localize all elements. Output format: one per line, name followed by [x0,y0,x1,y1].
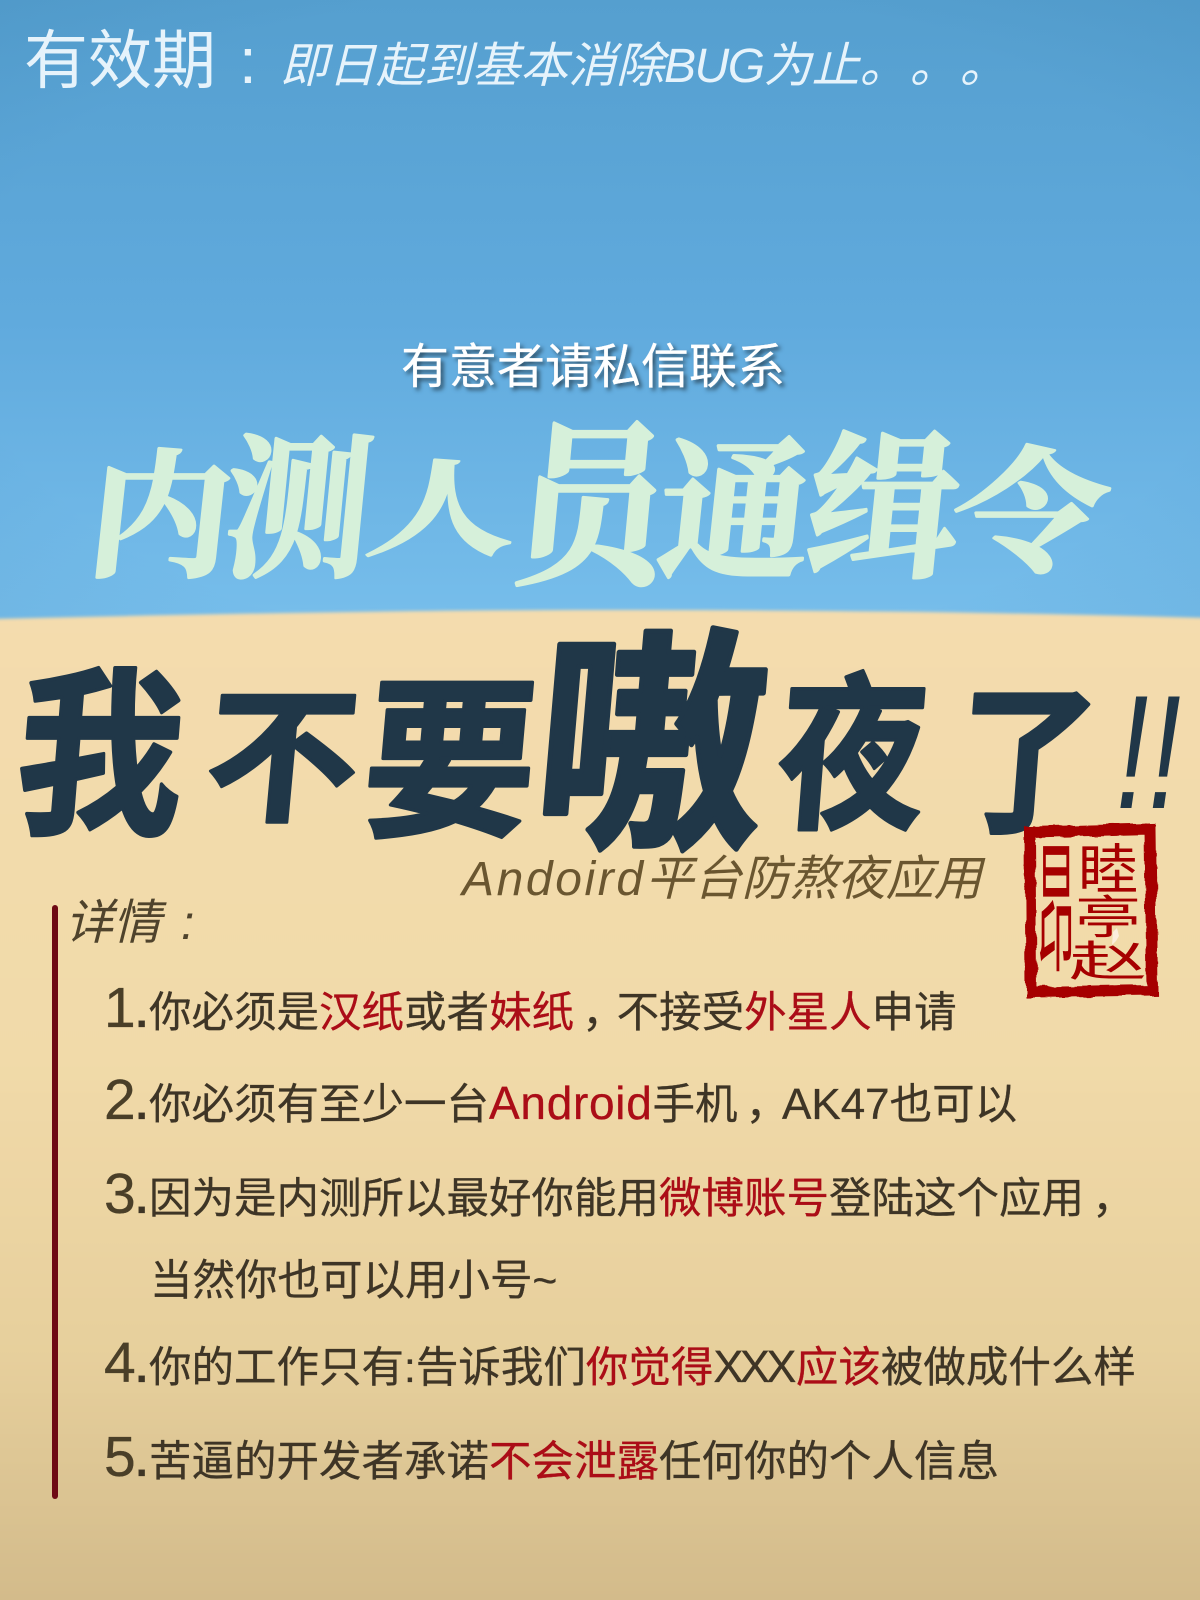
rule 3: 3.因为是内测所以最好你能用微博账号登陆这个应用， [104,1162,1135,1226]
seal stamp: 亭 [1075,881,1141,947]
heading: no more late nights: 不 [198,641,369,852]
rule 4: 4.你的工作只有:告诉我们你觉得XXX应该被做成什么样 [104,1331,1136,1395]
seal stamp: 昂 [1037,795,1075,1001]
seal highlight [1112,928,1119,945]
validity text: 即日起到基本消除BUG为止 [280,40,860,93]
heading: no more late nights: 了 [949,634,1106,866]
validity text: 。 [910,40,958,93]
validity text: 。 [960,40,1008,93]
seal stamp: 赵 [1069,928,1147,989]
heading: no more late nights: 嗷 [523,556,783,897]
heading: wanted notice: 通 [649,390,824,609]
heading: wanted notice: 员 [503,367,703,621]
heading: wanted notice: 令 [943,404,1123,600]
contact note: 有意者请私信联系 [401,341,785,394]
details label: 详情 : [65,897,194,950]
rule 3 continued: 当然你也可以用小号~ [150,1258,557,1305]
heading: wanted notice: 内 [80,407,243,606]
heading: no more late nights: 要 [355,623,549,872]
vertical bar [52,905,58,1499]
validity text: 。 [860,40,908,93]
rule 2: 2.你必须有至少一台Android手机，AK47也可以 [104,1068,1017,1132]
validity line [24,25,1008,97]
heading: no more late nights: 夜 [770,620,937,864]
rule 5: 5.苦逼的开发者承诺不会泄露任何你的个人信息 [104,1425,999,1489]
rule 1: 1.你必须是汉纸或者妹纸，不接受外星人申请 [104,976,957,1040]
heading: wanted notice: 人 [358,427,531,578]
heading: wanted notice: 缉 [798,383,973,610]
heading: wanted notice: 测 [215,386,383,609]
exclamation marks: !! [1116,661,1181,842]
seal stamp: 睦 [1078,827,1138,905]
heading: no more late nights: 我 [8,611,195,871]
subtitle: Andoird平台防熬夜应用 [462,853,982,906]
validity label: 有效期 : [24,25,257,97]
